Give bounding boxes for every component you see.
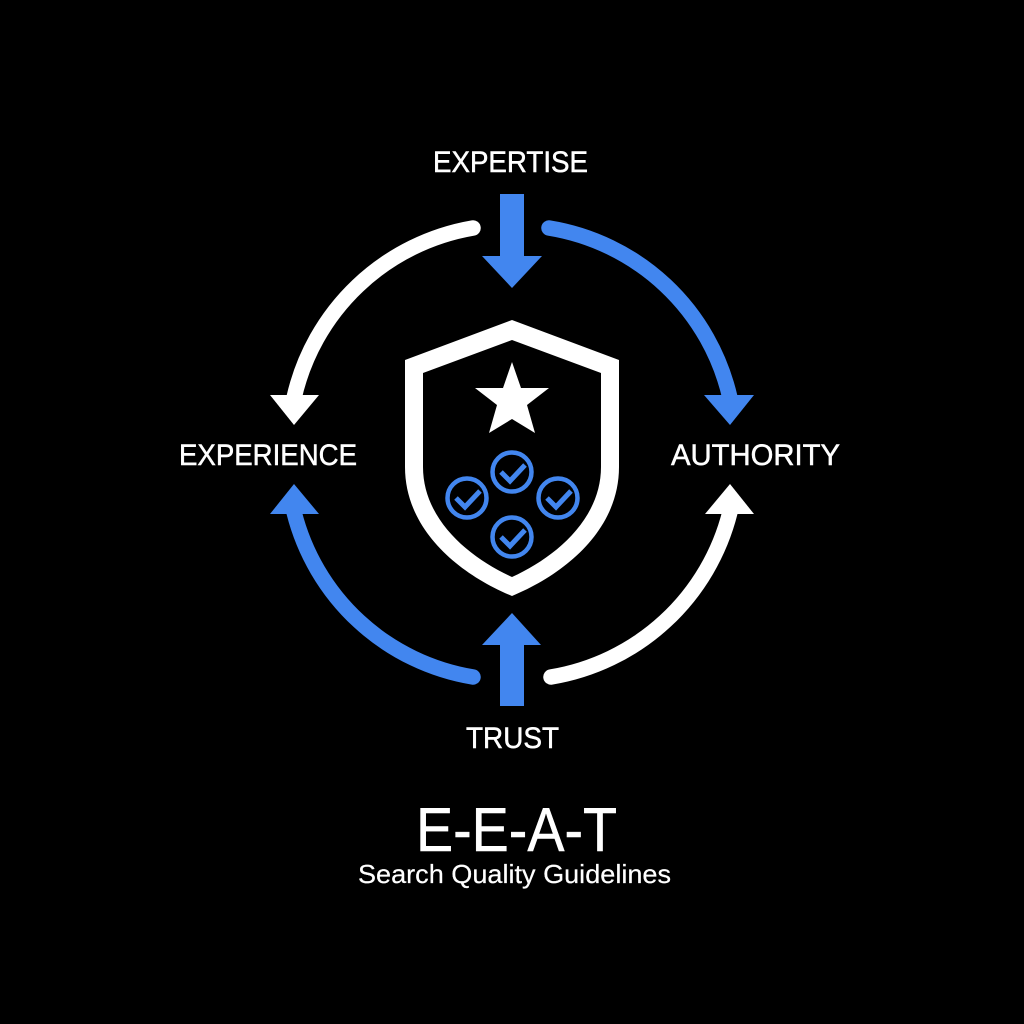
check badge: bottom bbox=[492, 518, 532, 556]
arrow: trust up into shield bbox=[482, 613, 541, 706]
shield icon bbox=[405, 320, 619, 596]
label: expertise: EXPERTISE bbox=[433, 146, 588, 179]
star bbox=[475, 362, 549, 433]
shield outline bbox=[405, 320, 619, 596]
arrow: expertise to experience bbox=[270, 228, 473, 425]
subtitle: Search Quality Guidelines bbox=[358, 859, 671, 889]
check badge: left bbox=[448, 478, 486, 518]
label: authority: AUTHORITY bbox=[671, 439, 840, 472]
arrow: expertise down into shield bbox=[482, 194, 542, 288]
arrow: trust to authority bbox=[551, 484, 754, 677]
title: E-E-A-T bbox=[416, 796, 617, 865]
arrow: trust to experience bbox=[270, 484, 473, 677]
check badge: top bbox=[492, 452, 532, 492]
label: trust: TRUST bbox=[466, 722, 559, 755]
check badge: right bbox=[538, 478, 578, 518]
label: experience: EXPERIENCE bbox=[179, 439, 357, 472]
arrow: expertise to authority bbox=[549, 228, 754, 425]
